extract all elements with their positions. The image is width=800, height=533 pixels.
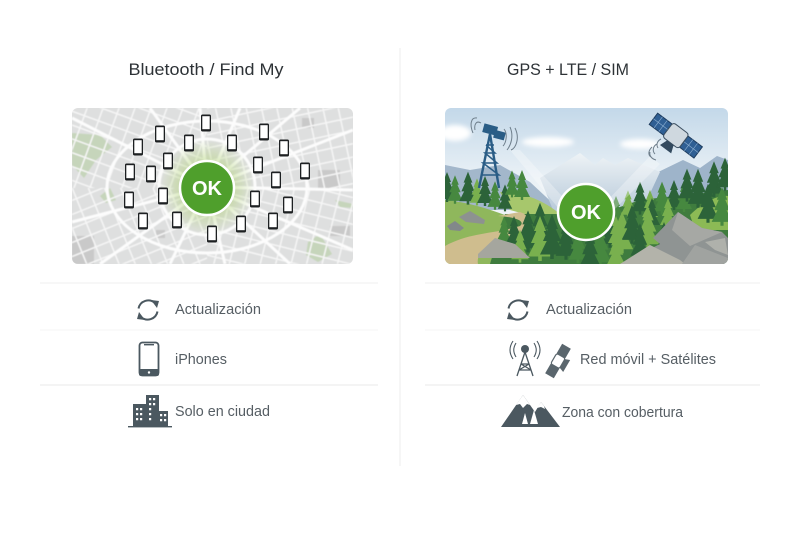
icon: iPhone xyxy=(139,342,159,376)
heading: Bluetooth / Find My: Bluetooth / Find My xyxy=(128,60,284,79)
mountains xyxy=(445,153,728,215)
row: Zona con cobertura: Zona con cobertura xyxy=(562,405,684,421)
panel: mountain landscape with tower and satellite xyxy=(439,108,734,270)
icon: antenna tower xyxy=(510,341,540,376)
badge: OK on landscape xyxy=(558,184,614,240)
panel: city map with nearby iPhones xyxy=(72,108,353,264)
icon: mountains with trees xyxy=(501,395,560,427)
cell tower xyxy=(471,118,517,188)
icon: refresh arrows xyxy=(507,300,529,320)
row: Zona con cobertura xyxy=(501,395,684,427)
row: left Actualización xyxy=(137,300,261,320)
icon: refresh arrows xyxy=(137,300,159,320)
row: Solo en ciudad xyxy=(128,395,270,427)
map main roads xyxy=(72,108,353,264)
map parks xyxy=(72,133,353,262)
row: Red móvil + Satélites: Red móvil + Satélites xyxy=(580,352,716,368)
heading: GPS + LTE / SIM: GPS + LTE / SIM xyxy=(507,60,629,79)
row: iPhones: iPhones xyxy=(175,352,227,368)
badge: OK on map: OK xyxy=(192,178,223,200)
badge: OK on landscape: OK xyxy=(571,202,602,224)
map fine streets xyxy=(72,108,207,188)
light beams xyxy=(510,150,660,212)
row: right Actualización xyxy=(507,300,632,320)
nearby iPhones xyxy=(124,114,310,242)
row: right Actualización: Actualización xyxy=(546,302,632,318)
dirt trail xyxy=(445,212,528,264)
badge: OK on map xyxy=(180,161,234,215)
row: left Actualización: Actualización xyxy=(175,302,261,318)
icon: satellite xyxy=(545,344,575,381)
clouds xyxy=(439,125,660,149)
row: Solo en ciudad: Solo en ciudad xyxy=(175,404,270,420)
hills xyxy=(445,190,728,264)
rocks xyxy=(447,211,730,264)
front forest xyxy=(498,203,666,264)
icon: city buildings xyxy=(128,395,172,427)
back forest xyxy=(439,158,734,228)
row: Red móvil + Satélites xyxy=(510,341,716,381)
row: iPhones xyxy=(139,342,227,376)
satellite xyxy=(648,112,703,159)
